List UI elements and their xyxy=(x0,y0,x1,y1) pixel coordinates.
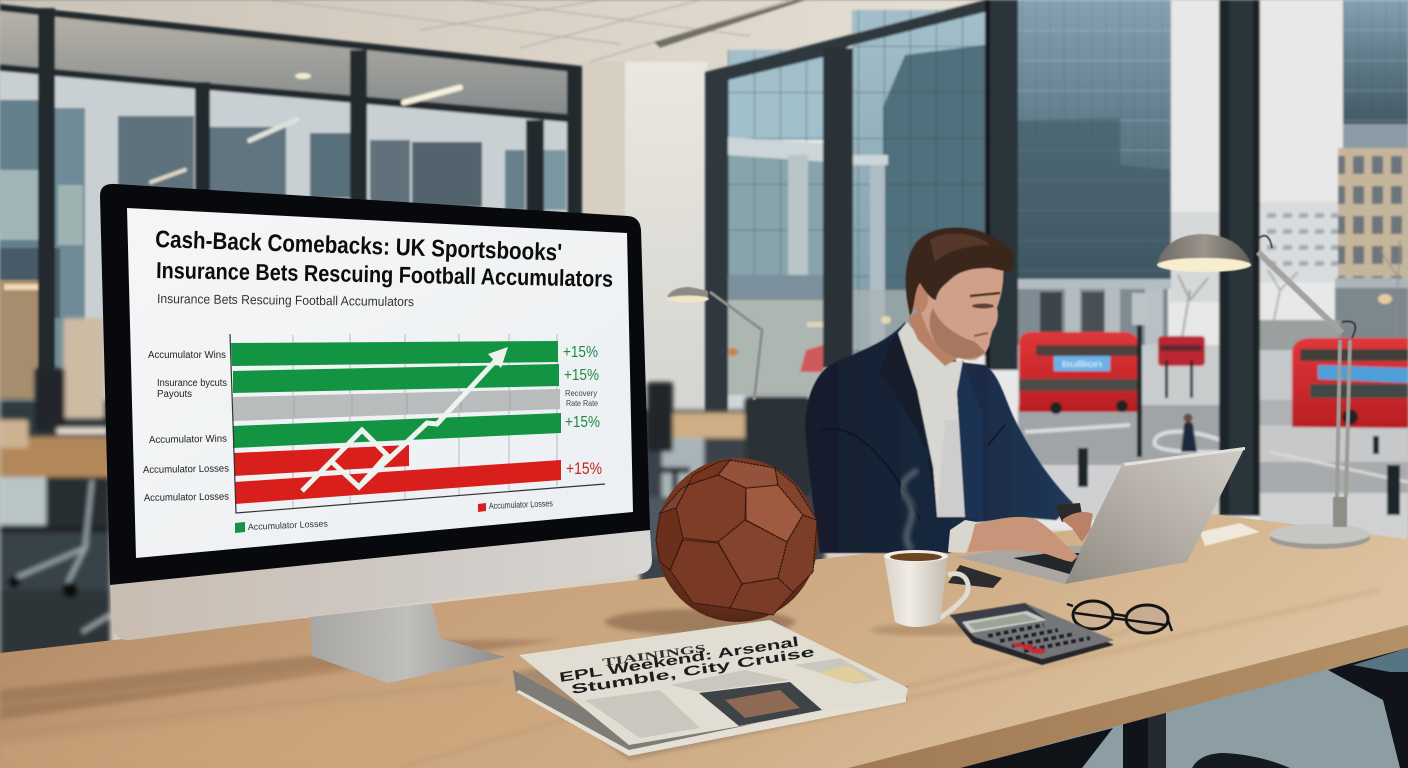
laptop lid xyxy=(1065,447,1245,584)
ear xyxy=(912,283,928,313)
left window wall with exterior buildings xyxy=(0,4,582,400)
lamp arm xyxy=(1258,252,1342,333)
chart row labels: Accumulator Losses xyxy=(143,464,229,476)
chair bottom right xyxy=(1192,645,1408,768)
street furniture xyxy=(1078,293,1400,515)
right desk lamp xyxy=(1157,234,1370,549)
gray bar xyxy=(233,389,560,421)
column wall xyxy=(582,62,707,412)
chart row labels: Insurance bycuts xyxy=(157,378,227,389)
background office furniture xyxy=(0,318,825,660)
shirt xyxy=(898,322,965,517)
street xyxy=(1018,345,1408,538)
bar chart xyxy=(230,334,605,513)
newspaper photo xyxy=(699,665,871,726)
chart row labels: Accumulator Losses xyxy=(144,492,229,504)
desk front edge xyxy=(848,625,1408,768)
man in navy suit xyxy=(748,228,1073,553)
ball panels xyxy=(656,460,817,615)
newspaper headline: Stumble, City Cruise xyxy=(570,644,816,697)
background chair legs xyxy=(15,480,92,586)
chart value labels: Recovery xyxy=(565,389,597,398)
laptop xyxy=(948,447,1245,584)
hands on keyboard xyxy=(948,503,1093,562)
background table and cup xyxy=(0,420,110,477)
chart value labels: +15% xyxy=(564,367,599,384)
chart row labels: Payouts xyxy=(157,389,192,400)
chart value labels xyxy=(563,344,602,478)
background desk lamp xyxy=(667,287,762,410)
chart axes xyxy=(230,334,605,513)
chart row labels: Accumulator Wins xyxy=(148,350,226,361)
desk legs xyxy=(960,712,1166,768)
phone xyxy=(948,565,1002,588)
chart row labels: Accumulator Wins xyxy=(149,434,227,446)
chart row labels xyxy=(143,350,229,504)
green bar 3 xyxy=(233,413,561,448)
torso and jacket xyxy=(805,322,1073,553)
chart title: Insurance Bets Rescuing Football Accumulators xyxy=(156,257,613,292)
distant white buildings xyxy=(1170,202,1340,302)
chart legend xyxy=(235,498,553,533)
face xyxy=(917,262,1003,360)
green bar 1 xyxy=(231,341,558,366)
newspaper article columns xyxy=(585,658,880,738)
window frames xyxy=(705,0,1260,516)
laptop base and keyboard xyxy=(957,545,1095,584)
stubble and features xyxy=(930,293,1000,359)
lamp base xyxy=(1270,497,1370,549)
notebook xyxy=(1200,523,1260,546)
right window: buildings, sky and street xyxy=(705,0,1408,538)
monitor screen xyxy=(127,208,633,558)
chart value labels: +15% xyxy=(566,459,602,478)
newspaper xyxy=(513,620,908,760)
window mullions xyxy=(0,4,582,400)
carpet under desk xyxy=(900,620,1408,768)
glass tower xyxy=(1018,0,1171,379)
calculator xyxy=(950,603,1114,665)
lamp glow xyxy=(1157,258,1251,272)
monitor stand xyxy=(310,603,505,683)
monitor bezel xyxy=(100,184,650,585)
green bar 2 xyxy=(233,364,559,393)
background chair back xyxy=(35,368,65,432)
football xyxy=(605,458,818,635)
newspaper headline xyxy=(558,634,816,697)
desk xyxy=(0,514,1408,768)
monitor xyxy=(100,184,652,683)
mid windows buildings xyxy=(727,10,985,415)
ceiling light reflections xyxy=(149,73,464,185)
background side table xyxy=(663,413,748,438)
chart value labels: Rate Rate xyxy=(566,399,598,408)
lamp shade xyxy=(1157,234,1252,266)
jacket lapels xyxy=(820,333,1005,520)
red bar 2 xyxy=(235,460,561,504)
coffee steam xyxy=(902,470,918,550)
chair back behind man xyxy=(748,400,810,495)
chart legend: Accumulator Losses xyxy=(489,498,553,511)
trend arrow xyxy=(302,347,508,491)
chart title: Cash-Back Comebacks: UK Sportsbooks' xyxy=(155,226,562,266)
hair xyxy=(906,228,1014,316)
glasses xyxy=(1067,601,1172,633)
desk top xyxy=(0,514,1408,768)
coffee mug xyxy=(870,550,990,636)
newspaper headline: EPL Weekend: Arsenal xyxy=(558,634,800,685)
monitor chin xyxy=(110,530,652,640)
newspaper masthead: TIAININGS xyxy=(602,643,706,669)
chart legend: Accumulator Losses xyxy=(248,518,328,532)
calculator keys xyxy=(988,625,1090,651)
neck xyxy=(908,300,958,366)
background chairs xyxy=(647,382,810,505)
chart value labels: +15% xyxy=(565,414,600,431)
background monitor xyxy=(63,318,104,418)
far right tan and glass buildings xyxy=(1178,0,1408,350)
chart subtitle: Insurance Bets Rescuing Football Accumulators xyxy=(157,291,415,309)
chart title xyxy=(155,226,613,292)
red bar 1 xyxy=(234,445,409,476)
red double-decker buses: bullion xyxy=(1062,359,1102,369)
red double-decker buses xyxy=(1019,332,1408,428)
chart value labels: +15% xyxy=(563,344,598,361)
